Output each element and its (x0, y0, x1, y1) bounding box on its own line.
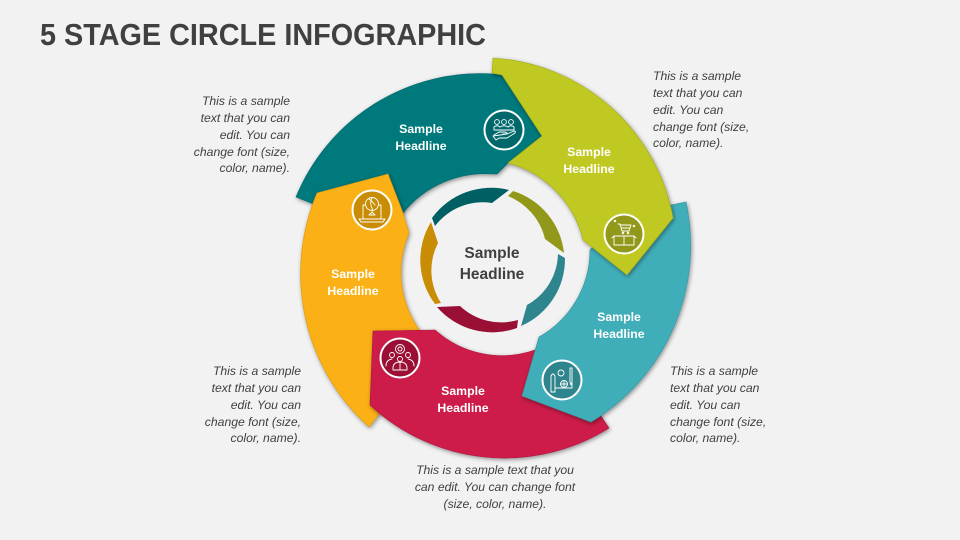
center headline: Headline (460, 266, 525, 283)
text block: bottom left: text that you can (212, 381, 301, 395)
text block: bottom right: This is a sample (670, 364, 758, 378)
inner ring arc: light teal (521, 254, 565, 326)
text block: top right: This is a sample (653, 69, 741, 83)
center headline (460, 245, 525, 283)
text block: bottom center: This is a sample text that you (416, 463, 574, 477)
headline: light teal: Sample (597, 310, 641, 324)
text block: bottom right: change font (size, (670, 415, 766, 429)
text block: top left: change font (size, (194, 145, 290, 159)
panel: red segment (370, 330, 609, 458)
inner ring arc: olive (508, 191, 564, 253)
headline: olive: Headline (563, 162, 615, 176)
center headline: Sample (464, 245, 520, 262)
panel: light teal segment (522, 202, 691, 422)
headline: red (437, 384, 489, 415)
text block: bottom center: can edit. You can change font (415, 480, 576, 494)
icon: laptop and globe (352, 190, 392, 230)
text block: bottom center: (size, color, name). (444, 497, 546, 511)
text block: bottom left (205, 364, 301, 445)
inner ring arc: teal (432, 188, 509, 226)
headline: teal: Headline (395, 139, 447, 153)
headline: red: Sample (441, 384, 485, 398)
text block: bottom left: edit. You can (231, 398, 301, 412)
icon: people with gear (380, 338, 420, 378)
icon: shopping cart and box (604, 214, 644, 254)
panel: orange segment (301, 174, 425, 427)
text block: top right: text that you can (653, 86, 743, 100)
headline: olive: Sample (567, 145, 611, 159)
headline: olive (563, 145, 615, 176)
text block: top left: text that you can (201, 111, 290, 125)
headline: red: Headline (437, 401, 489, 415)
icon: team in hand (484, 110, 524, 150)
panel: olive segment (492, 58, 673, 275)
text block: bottom left: This is a sample (213, 364, 301, 378)
text block: bottom left: change font (size, (205, 415, 301, 429)
text block: top left: edit. You can (220, 128, 290, 142)
text block: bottom right: color, name). (670, 431, 740, 445)
text block: bottom right: text that you can (670, 381, 760, 395)
headline: light teal: Headline (593, 327, 645, 341)
headline: teal: Sample (399, 122, 443, 136)
inner ring arc: orange (420, 222, 441, 304)
inner ring arc: red (437, 306, 518, 332)
headline: teal (395, 122, 447, 153)
text block: top left: color, name). (220, 161, 290, 175)
headline: orange: Sample (331, 267, 375, 281)
headline: orange: Headline (327, 284, 379, 298)
text block: bottom left: color, name). (231, 431, 301, 445)
panel: teal segment (296, 74, 542, 215)
headline: light teal (593, 310, 645, 341)
text block: top right: color, name). (653, 136, 723, 150)
text block: top right: change font (size, (653, 120, 749, 134)
text block: top left: This is a sample (202, 94, 290, 108)
text block: bottom center (415, 463, 576, 511)
icon: design plan (542, 360, 582, 400)
text block: top left (194, 94, 290, 175)
text block: top right: edit. You can (653, 103, 723, 117)
title: 5 STAGE CIRCLE INFOGRAPHIC (40, 17, 486, 52)
text block: top right (653, 69, 749, 150)
headline: orange (327, 267, 379, 298)
text block: bottom right: edit. You can (670, 398, 740, 412)
text block: bottom right (670, 364, 766, 445)
